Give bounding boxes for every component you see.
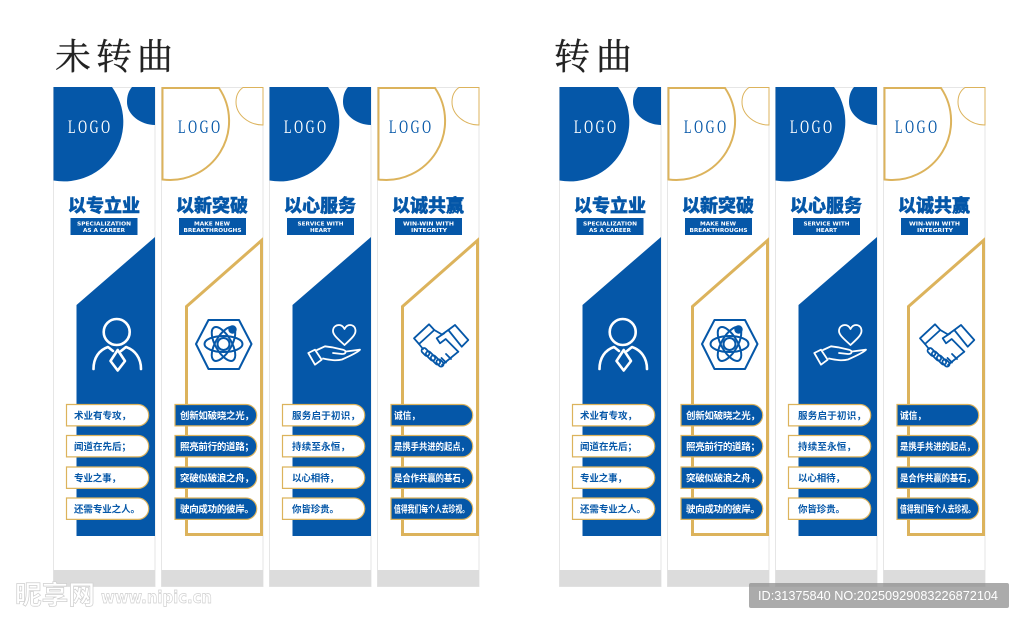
panel: integrity: INTEGRITY xyxy=(411,228,448,234)
pills: 值得我们每个人去珍视。 xyxy=(900,504,975,516)
watermark: site name xyxy=(15,575,212,612)
panel: service: SERVICE WITH xyxy=(804,222,850,228)
pills: 持续至永恒， xyxy=(292,441,350,453)
pills: 专业之事， xyxy=(74,472,121,484)
panel: service: HEART xyxy=(816,228,837,234)
panel: service: 以心服务 xyxy=(790,195,862,216)
pills xyxy=(391,404,473,519)
panel: service: SERVICE WITH xyxy=(298,222,344,228)
panel group: right set xyxy=(560,87,985,586)
panel: breakthroughs: LOGO xyxy=(178,118,223,138)
panel: breakthroughs xyxy=(162,88,263,586)
panel: breakthroughs: MAKE NEW xyxy=(700,222,736,228)
watermark: site name: www.nipic.cn xyxy=(101,588,212,608)
pills: 诚信， xyxy=(900,410,926,422)
pills: 术业有专攻， xyxy=(580,410,637,422)
panel: breakthroughs: LOGO xyxy=(684,118,729,138)
panel: breakthroughs: BREAKTHROUGHS xyxy=(690,228,748,234)
pills: 持续至永恒， xyxy=(798,441,856,453)
panel: breakthroughs: 以新突破 xyxy=(176,195,248,216)
pills: 照亮前行的道路； xyxy=(180,441,254,453)
pills xyxy=(788,404,871,519)
panel: specialization: LOGO xyxy=(68,118,113,138)
icon: person xyxy=(94,319,141,370)
pills: 突破似破浪之舟， xyxy=(180,472,254,484)
pills: 是携手共进的起点， xyxy=(394,441,469,453)
icon: atom hexagon xyxy=(702,320,758,369)
icon: hand with heart xyxy=(308,325,360,365)
pills xyxy=(175,404,257,519)
pills xyxy=(897,404,979,519)
icon: handshake xyxy=(414,324,468,368)
panel: specialization: AS A CAREER xyxy=(83,228,126,234)
pills: 以心相待， xyxy=(798,472,845,484)
icon: hand with heart xyxy=(814,325,866,365)
pills: 还需专业之人。 xyxy=(74,504,140,516)
pills: 术业有专攻， xyxy=(74,410,131,422)
panel: integrity: 以诚共赢 xyxy=(392,195,464,216)
panel: breakthroughs: MAKE NEW xyxy=(194,222,230,228)
pills xyxy=(572,404,655,519)
pills: 服务启于初识， xyxy=(292,410,360,422)
pills: 你皆珍贵。 xyxy=(798,504,845,516)
pills xyxy=(681,404,763,519)
icon: atom hexagon xyxy=(196,320,252,369)
panel: integrity: WIN-WIN WITH xyxy=(403,222,454,228)
pills: 创新如破晓之光， xyxy=(180,410,254,422)
pills: 是合作共赢的基石， xyxy=(394,472,469,484)
panel: breakthroughs: BREAKTHROUGHS xyxy=(184,228,242,234)
panel: integrity: LOGO xyxy=(895,118,940,138)
image id badge xyxy=(749,583,1009,608)
panel: specialization xyxy=(54,87,155,586)
panel: service: LOGO xyxy=(790,118,835,138)
panel: breakthroughs: 以新突破 xyxy=(682,195,754,216)
panel: integrity xyxy=(884,88,985,586)
pills: 闻道在先后； xyxy=(580,441,637,453)
pills: 是合作共赢的基石， xyxy=(900,472,975,484)
heading: converted: 转曲 xyxy=(554,37,632,77)
panel: specialization: SPECIALIZATION xyxy=(77,222,131,228)
pills: 闻道在先后； xyxy=(74,441,131,453)
image id badge: ID:31375840 NO:20250929083226872104 xyxy=(758,588,998,603)
pills: 你皆珍贵。 xyxy=(292,504,339,516)
pills: 创新如破晓之光， xyxy=(686,410,760,422)
icon: person xyxy=(600,319,647,370)
pills: 突破似破浪之舟， xyxy=(686,472,760,484)
panel: integrity: 以诚共赢 xyxy=(898,195,970,216)
pills: 还需专业之人。 xyxy=(580,504,646,516)
pills xyxy=(282,404,365,519)
pills: 以心相待， xyxy=(292,472,339,484)
panel: service xyxy=(270,87,371,586)
panel: service: 以心服务 xyxy=(284,195,356,216)
panel: specialization: SPECIALIZATION xyxy=(583,222,637,228)
panel: specialization xyxy=(560,87,661,586)
heading: unconverted: 未转曲 xyxy=(55,37,173,77)
panel: integrity xyxy=(378,88,479,586)
panel: service: LOGO xyxy=(284,118,329,138)
panel: integrity: INTEGRITY xyxy=(917,228,954,234)
panel: service: HEART xyxy=(310,228,331,234)
panel: specialization: 以专立业 xyxy=(574,195,646,216)
pills: 是携手共进的起点， xyxy=(900,441,975,453)
panel: integrity: LOGO xyxy=(389,118,434,138)
watermark: site name: 昵享网 xyxy=(15,575,95,612)
panel: integrity: WIN-WIN WITH xyxy=(909,222,960,228)
pills: 驶向成功的彼岸。 xyxy=(686,504,760,516)
panel: specialization: 以专立业 xyxy=(68,195,140,216)
pills xyxy=(66,404,149,519)
icon: handshake xyxy=(920,324,974,368)
pills: 驶向成功的彼岸。 xyxy=(180,504,254,516)
pills: 服务启于初识， xyxy=(798,410,866,422)
pills: 诚信， xyxy=(394,410,420,422)
panel: breakthroughs xyxy=(668,88,769,586)
pills: 照亮前行的道路； xyxy=(686,441,760,453)
panel: service xyxy=(776,87,877,586)
panel group: left set xyxy=(54,87,479,586)
panel: specialization: AS A CAREER xyxy=(589,228,632,234)
panel: specialization: LOGO xyxy=(574,118,619,138)
pills: 专业之事， xyxy=(580,472,627,484)
pills: 值得我们每个人去珍视。 xyxy=(394,504,469,516)
